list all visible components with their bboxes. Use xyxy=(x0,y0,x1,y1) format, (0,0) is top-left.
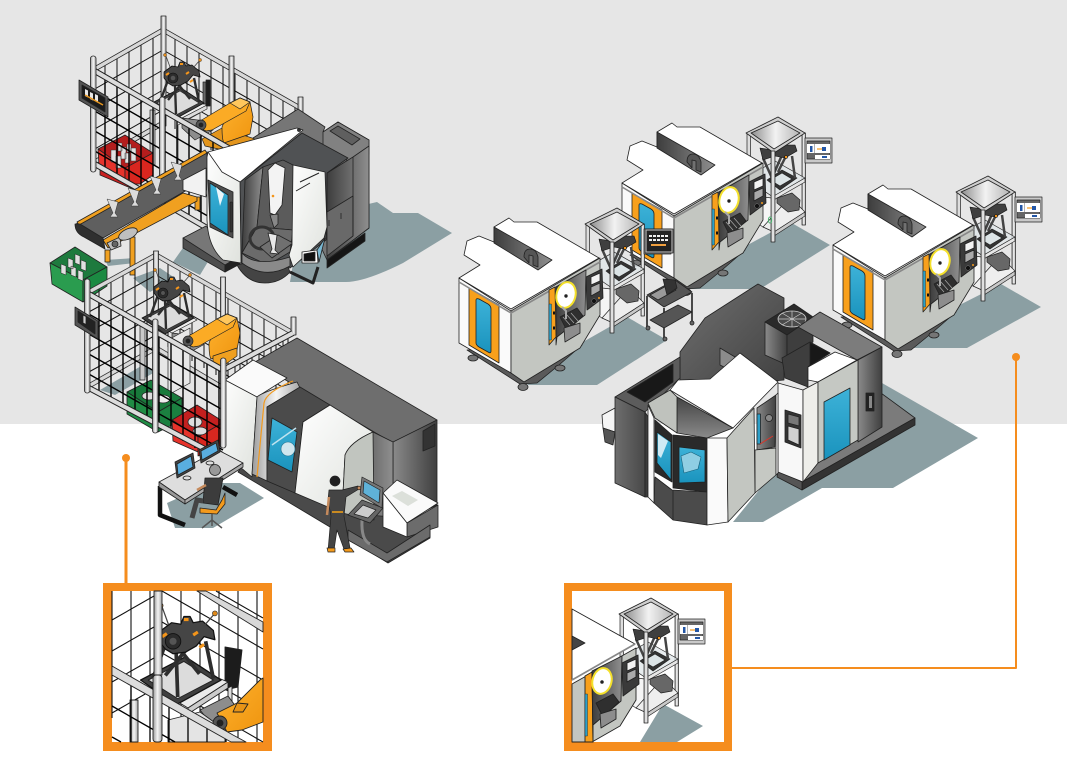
connector: machine inset xyxy=(732,353,1020,668)
orange robot arm xyxy=(196,98,258,152)
red crate with parts xyxy=(98,135,153,192)
lower robot cell rear fence xyxy=(87,251,296,417)
chamber interior xyxy=(677,397,733,438)
lathe operator and control panel xyxy=(327,476,383,552)
desk operator xyxy=(192,464,223,518)
inset rear mesh xyxy=(112,591,263,742)
grey bay right of housing xyxy=(342,432,393,517)
fence front mesh and rails xyxy=(90,56,232,240)
blue window xyxy=(639,204,654,258)
front leg xyxy=(771,151,775,242)
orange strip xyxy=(712,192,719,250)
conveyor motor xyxy=(107,225,139,250)
lathe blue window xyxy=(268,418,297,472)
top notch xyxy=(657,132,715,175)
top white right block xyxy=(808,352,857,382)
cart wheels xyxy=(646,321,694,341)
tower top plate xyxy=(746,117,805,153)
rear wall panel xyxy=(720,348,740,375)
rotary table xyxy=(237,227,293,283)
base platform xyxy=(777,385,915,490)
door front and window xyxy=(207,152,241,263)
white door right xyxy=(707,438,728,525)
inset front mesh xyxy=(112,686,226,742)
work area xyxy=(716,212,746,247)
panel arm xyxy=(290,267,318,283)
side opening xyxy=(757,395,776,450)
fence rear mesh xyxy=(93,16,303,199)
inset post xyxy=(153,591,162,742)
orange door stripe xyxy=(257,381,293,477)
tower robot xyxy=(760,145,797,178)
right face xyxy=(674,163,763,287)
vertical machining centre, middle xyxy=(622,117,832,296)
green crate xyxy=(50,247,107,302)
machine base plate xyxy=(183,226,240,272)
floor shadows xyxy=(100,202,1041,528)
inset front rail xyxy=(112,666,246,742)
lathe top xyxy=(255,338,437,443)
inset: delta robot close-up xyxy=(103,583,272,751)
desk top xyxy=(159,450,243,500)
machine body middle xyxy=(622,123,766,296)
door control panel xyxy=(302,238,325,263)
lower dark panel xyxy=(654,477,707,525)
conveyor belt xyxy=(75,150,207,275)
cart shelf xyxy=(650,305,692,328)
top machine: large milling centre xyxy=(183,109,369,283)
tower legs and shelves xyxy=(745,133,806,236)
right dark unit xyxy=(798,312,882,442)
tool disc xyxy=(717,185,741,215)
grey floor background xyxy=(0,0,1067,424)
desk legs xyxy=(160,486,237,525)
operator desk xyxy=(159,440,243,528)
inset rear rail xyxy=(197,591,263,632)
green cable xyxy=(768,217,772,223)
lower table and delta robot xyxy=(140,268,203,395)
lower monitor on fence xyxy=(75,307,98,339)
connector: lathe inset xyxy=(122,454,130,584)
white frame of side opening xyxy=(776,393,778,475)
rear cabinet xyxy=(253,109,369,268)
inset delta robot xyxy=(140,603,221,705)
large horizontal machining centre xyxy=(602,284,915,525)
blue door window xyxy=(824,388,850,460)
right white extension xyxy=(348,480,438,562)
vertical machining centre, right xyxy=(833,176,1042,358)
right door window xyxy=(673,435,707,492)
left column xyxy=(615,397,645,497)
base trim xyxy=(630,250,745,289)
conveyor legs xyxy=(105,197,200,275)
operator cart xyxy=(646,279,694,341)
monitor on top fence xyxy=(79,80,108,117)
right door xyxy=(289,165,327,267)
lathe end face xyxy=(393,420,437,527)
cart laptop xyxy=(663,279,677,295)
screen xyxy=(360,477,383,508)
feet xyxy=(631,260,728,296)
machine chamber xyxy=(240,133,348,268)
grey panel xyxy=(727,408,755,522)
control panel xyxy=(749,174,766,215)
door hood xyxy=(208,128,303,182)
door dark centre xyxy=(267,387,330,493)
control panel xyxy=(785,410,801,448)
central black bay xyxy=(782,342,830,387)
left door window xyxy=(655,420,672,482)
inset: machine tower close-up xyxy=(564,583,732,751)
lower cell front fence xyxy=(84,279,293,462)
chamfer grey xyxy=(648,390,677,433)
desk monitors xyxy=(175,440,220,480)
orange door xyxy=(632,193,662,268)
green crate in lower cell xyxy=(127,380,182,432)
red crate in lower cell xyxy=(172,405,224,456)
panel arm xyxy=(362,520,370,544)
grey inner panel xyxy=(342,432,374,520)
inset tower xyxy=(618,598,705,723)
delta robot xyxy=(152,53,204,119)
orange chair xyxy=(200,493,225,528)
left tower dark monitor xyxy=(645,229,673,253)
belt parts xyxy=(107,162,182,217)
left wing top xyxy=(615,357,680,412)
white side block xyxy=(602,408,615,445)
lower orange robot arm xyxy=(183,314,240,366)
white post left xyxy=(648,405,654,503)
vent box xyxy=(765,304,813,365)
white housing right xyxy=(295,405,373,513)
operator xyxy=(327,476,361,552)
white housing left xyxy=(220,360,287,477)
hood top xyxy=(670,353,778,428)
tower monitor xyxy=(805,138,832,163)
vertical machining centre, left xyxy=(459,208,673,390)
silver door frame xyxy=(252,382,300,481)
inset machine top xyxy=(572,609,639,742)
keyboard unit xyxy=(348,500,383,523)
rear dark wall xyxy=(680,284,784,390)
front panel xyxy=(778,360,858,482)
front face xyxy=(622,183,674,278)
cart legs xyxy=(647,283,692,338)
spindle xyxy=(268,163,285,228)
lathe machine xyxy=(220,338,438,563)
workpiece table xyxy=(150,80,213,180)
door opening xyxy=(719,175,749,250)
cart top xyxy=(647,280,692,307)
lathe base strip xyxy=(238,440,430,563)
top robot cell: fence, delta robot, orange arm, crate xyxy=(90,16,303,240)
white conveyor housing xyxy=(183,168,206,197)
inset table xyxy=(130,647,242,742)
blue strip xyxy=(712,209,714,245)
tower middle xyxy=(745,117,832,242)
inset floor shadow xyxy=(640,704,703,742)
top surface xyxy=(622,123,762,214)
inset orange arm xyxy=(213,678,263,732)
